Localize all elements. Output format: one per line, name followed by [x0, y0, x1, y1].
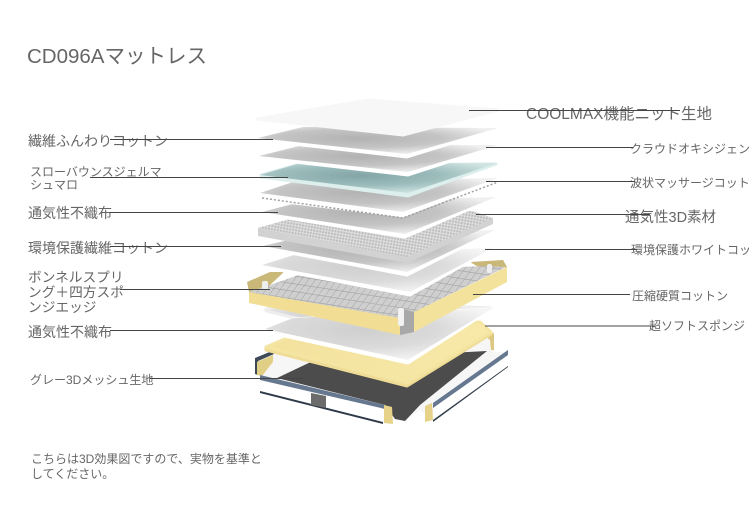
breathable non-woven sheet, lower: [265, 299, 493, 363]
note: してください。: [31, 467, 114, 481]
label: grey 3D mesh: グレー3Dメッシュ生地: [30, 373, 153, 387]
label: bonnell spring: [28, 270, 270, 315]
label: fibre soft cotton: 繊維ふんわりコットン: [28, 133, 168, 149]
label: compressed hard cotton: 圧縮硬質コットン: [632, 288, 728, 303]
slow rebound gel memory foam: [260, 163, 497, 196]
base: grey 3D mesh cover: [255, 333, 508, 424]
label: bonnell spring: ボンネルスプリ: [28, 270, 124, 285]
label: breathable non-woven upper: 通気性不織布: [28, 205, 112, 221]
label: breathable non-woven lower: 通気性不織布: [28, 324, 112, 340]
note: [31, 451, 262, 481]
label: eco fibre cotton: 環境保護繊維コットン: [28, 240, 168, 256]
fibre soft cotton: [258, 127, 498, 157]
non-woven sheet above spring: [262, 248, 493, 295]
breathable 3D material: [258, 211, 493, 263]
label: slow rebound gel memory foam: [30, 165, 288, 192]
mattress layer stack: [247, 100, 508, 424]
note: こちらは3D効果図ですので、実物を基準と: [31, 451, 262, 466]
cloud oxygen layer: [259, 145, 498, 175]
eco white cotton layer: [263, 230, 495, 275]
label: slow rebound gel memory foam: シュマロ: [30, 178, 78, 192]
breathable sheet: [262, 197, 496, 237]
COOLMAX top knit: [257, 100, 498, 135]
label: bonnell spring: ング＋四方スポ: [28, 285, 124, 300]
bonnell spring with sponge edge: [247, 260, 507, 335]
wave massage cotton: [260, 178, 498, 218]
label: cloud oxygen: クラウドオキシジェン: [630, 142, 750, 156]
label: slow rebound gel memory foam: スローバウンスジェルマ: [30, 165, 162, 179]
label: COOLMAX knit: COOLMAX機能ニット生地: [526, 105, 712, 123]
title: CD096Aマットレス: [27, 45, 207, 68]
soft sponge layer: [266, 322, 491, 386]
label: super soft sponge: 超ソフトスポンジ: [649, 318, 745, 333]
label: breathable 3D material: 通気性3D素材: [625, 209, 716, 226]
label: bonnell spring: ンジエッジ: [28, 300, 96, 315]
